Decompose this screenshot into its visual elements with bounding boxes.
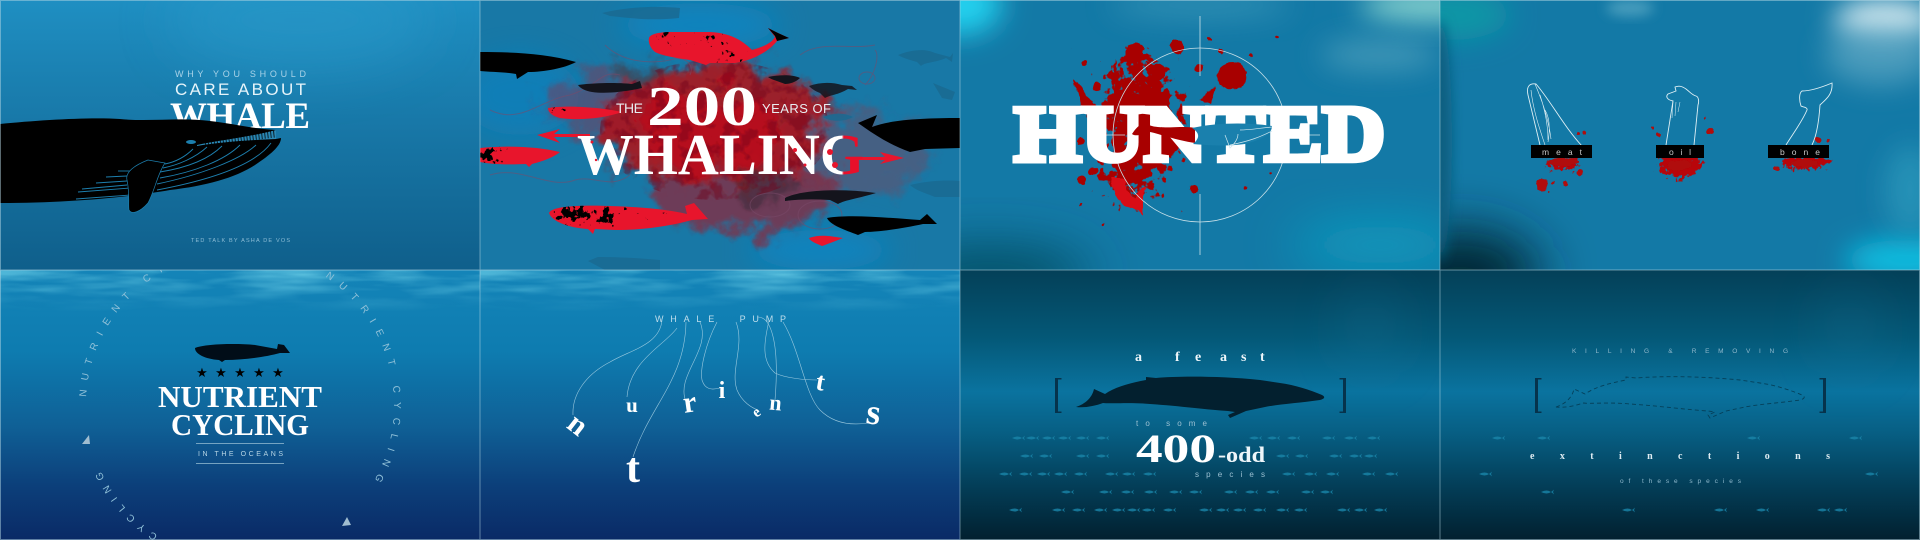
text: years of: YEARS OF	[762, 101, 831, 116]
panel: meat oil bone	[1440, 0, 1920, 270]
heading: a feast: afeast	[1135, 350, 1265, 365]
rule bottom	[196, 462, 284, 465]
label: oil	[1656, 145, 1704, 158]
icon: dashed whale outline	[1556, 377, 1804, 418]
connecting threads	[573, 317, 868, 457]
icon: flipper outline	[1527, 84, 1582, 146]
falling letters: nutrients: n	[561, 406, 595, 443]
blood mottling	[600, 60, 830, 200]
remaining species	[1479, 436, 1878, 512]
left bracket	[1535, 378, 1542, 413]
text: killing and removing: KILLING & REMOVING	[1572, 348, 1788, 355]
stat: 400: 400	[1136, 426, 1216, 471]
circular text: NUTRIENT CYCLING	[326, 272, 401, 482]
heading: extinctions: extinctions	[1530, 451, 1830, 462]
triangle markers	[82, 435, 351, 526]
circular text	[79, 270, 401, 540]
heading: whale: WHALE	[170, 96, 310, 137]
left bracket	[1055, 378, 1062, 413]
red whales	[476, 107, 843, 246]
falling letters: nutrients: n	[768, 390, 783, 416]
panel: a feast	[960, 270, 1440, 540]
black whale left	[480, 52, 576, 79]
stars: ★	[215, 365, 227, 380]
label: oil: oil	[1669, 147, 1691, 157]
red splatter on text	[590, 140, 838, 168]
falling letters: nutrients: i	[719, 378, 726, 404]
icon: whale silhouette	[1076, 377, 1324, 418]
stars: ★	[196, 365, 208, 380]
icon: whale tail outline	[1786, 83, 1832, 145]
heading: hunted: HUNTED	[1014, 92, 1385, 178]
panel: hunted	[960, 0, 1440, 270]
blood splatter under labels	[1536, 117, 1833, 193]
red sperm whale top	[649, 28, 789, 65]
falling letters: nutrients: s	[864, 391, 883, 433]
dark whales centre	[578, 75, 960, 235]
right bracket	[1340, 378, 1346, 413]
heading: why you should: WHY YOU SHOULD	[175, 69, 306, 79]
veins	[490, 45, 877, 229]
stars: ★	[253, 365, 265, 380]
falling letters: nutrients: u	[626, 393, 638, 417]
icon: whale head outline	[1666, 86, 1699, 145]
panel: extinctions	[1440, 270, 1920, 540]
heading: care about: CARE ABOUT	[175, 80, 306, 99]
panel: whale pump	[480, 270, 960, 540]
heading: whaling: WHALING	[577, 122, 864, 187]
credit: TED TALK BY ASHA DE VOS	[191, 238, 290, 244]
blood splatter	[1073, 36, 1279, 226]
falling letters: nutrients: r	[681, 385, 699, 420]
text: species: species	[1195, 470, 1265, 479]
text: 200: 200	[647, 76, 757, 138]
stars: ★	[272, 365, 284, 380]
label: meat: meat	[1542, 147, 1583, 157]
faint whales	[588, 7, 960, 270]
heading: nutrient: NUTRIENT	[158, 379, 322, 414]
falling letters: nutrients: t	[626, 446, 640, 492]
shoal of species	[999, 436, 1398, 512]
text: of these species: of these species	[1620, 478, 1742, 485]
panel: 200 years of whaling	[460, 0, 960, 270]
label: meat	[1531, 145, 1592, 158]
heading: whale pump: WHALE PUMP	[655, 314, 786, 324]
right bracket	[1820, 378, 1826, 413]
subtitle: IN THE OCEANS	[198, 451, 283, 458]
text: the: THE	[616, 100, 643, 116]
rule top	[196, 442, 284, 445]
panel: nutrient cycling	[0, 270, 480, 540]
falling letters: nutrients: t	[814, 367, 828, 397]
blood cloud	[540, 60, 935, 233]
label: bone: bone	[1780, 147, 1820, 157]
stars	[197, 368, 283, 377]
circular text: CYCLING	[96, 472, 156, 540]
text: to some: to some	[1136, 419, 1208, 428]
icon: whale	[195, 344, 290, 362]
falling letters: nutrients	[561, 367, 883, 492]
heading: cycling: CYCLING	[171, 407, 309, 442]
crosshair scope	[1105, 16, 1320, 255]
stars: ★	[234, 365, 246, 380]
arrows	[537, 129, 904, 164]
icon: whale in crosshair	[1132, 123, 1272, 148]
stat: -odd: -odd	[1218, 442, 1265, 467]
circular text: NUTRIENT CYCLING	[79, 270, 162, 396]
panel: why you should care about whale	[0, 0, 480, 270]
icon: blue whale silhouette	[0, 118, 281, 212]
falling letters: nutrients: e	[749, 404, 764, 421]
label: bone	[1768, 145, 1829, 158]
